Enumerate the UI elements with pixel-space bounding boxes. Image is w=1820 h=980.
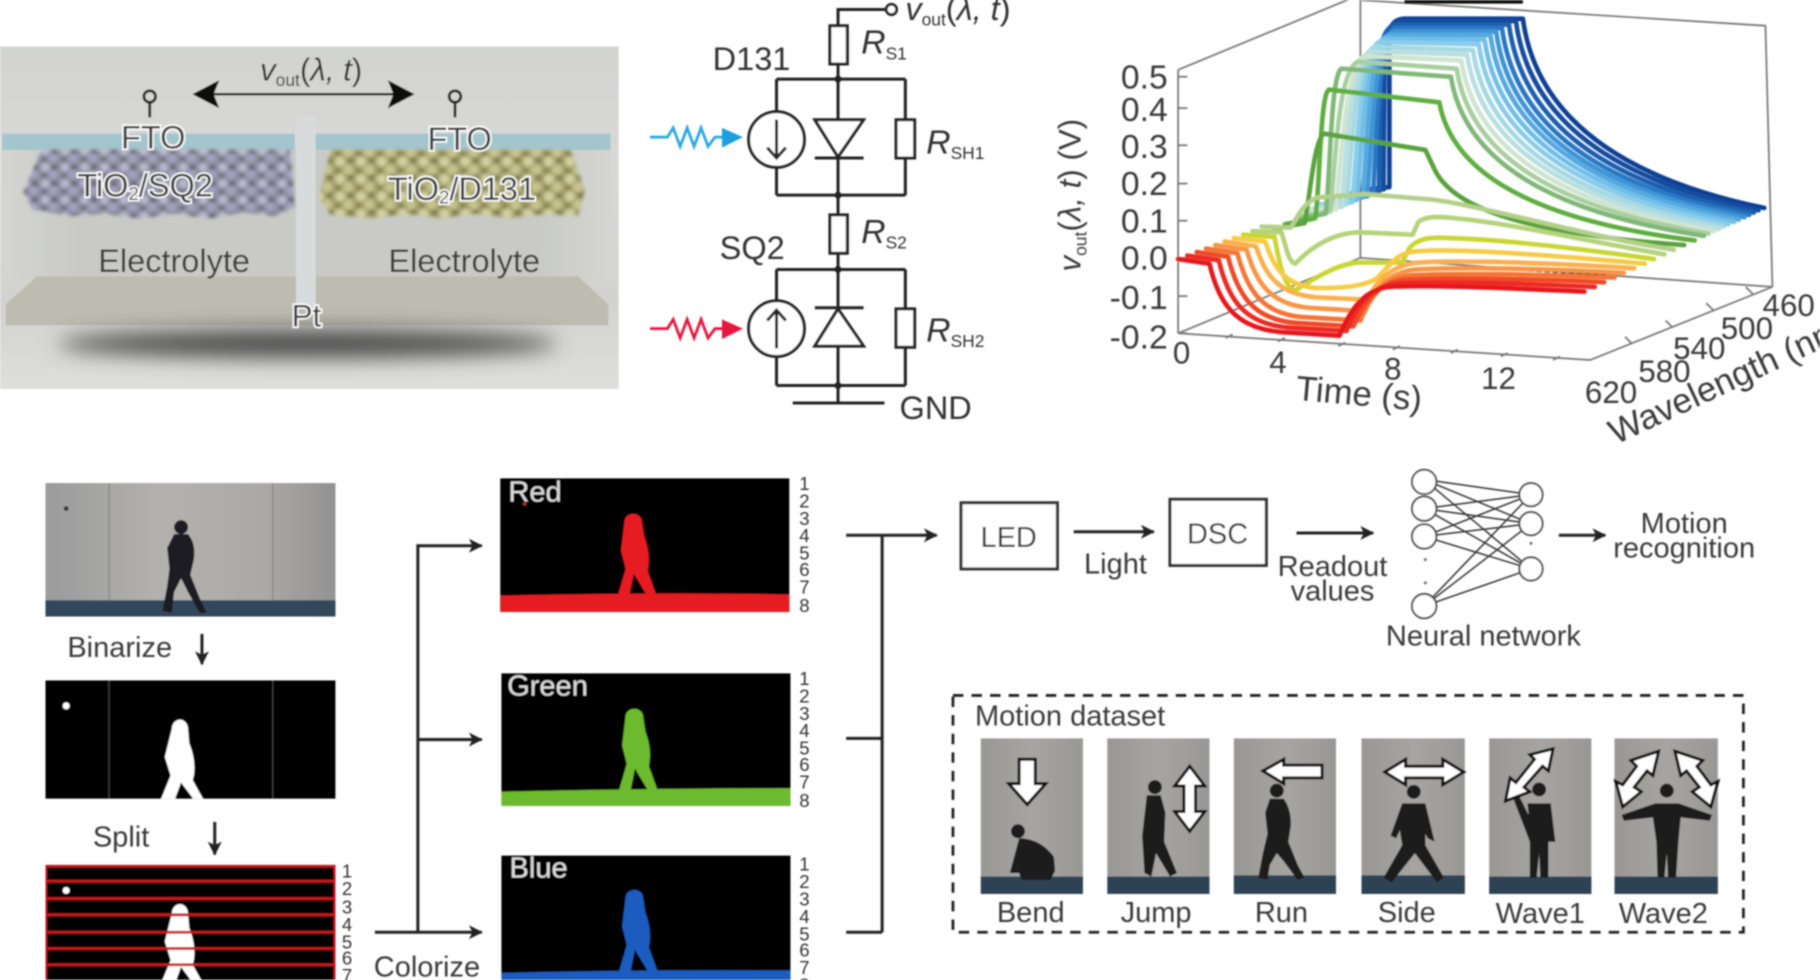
time axis labels: 12 [1481, 361, 1516, 396]
voltage axis labels: 0.3 [1121, 129, 1168, 166]
label RSH1: SH1 [951, 143, 984, 163]
heading motion dataset: Motion dataset [975, 701, 1165, 733]
red numbers: 3 [799, 508, 810, 529]
voltage label: ( [300, 52, 311, 87]
TiO2/SQ2 particles [23, 150, 295, 218]
label Green: Green [507, 670, 588, 702]
voltage axis title: v [1053, 254, 1088, 272]
top edge bar [1404, 0, 1523, 3]
shadow under cell [58, 330, 557, 358]
label Light: Light [1084, 549, 1147, 581]
wavelength axis labels: 580 [1638, 354, 1691, 389]
merge bracket arrow [846, 535, 937, 932]
label Blue: Blue [510, 853, 568, 885]
green numbers: 3 [799, 703, 810, 724]
split label: Split [93, 821, 149, 853]
split frame [45, 865, 335, 980]
label Red: Red [508, 477, 562, 509]
diode SQ2 [815, 308, 864, 346]
photo Run [1234, 738, 1336, 894]
label motion recognition: Motion [1641, 508, 1728, 540]
centre gap [296, 116, 316, 308]
pin left [144, 91, 156, 117]
labels: Wave1 [1496, 898, 1585, 930]
time axis title: Time (s) [1294, 369, 1424, 419]
split numbers: 1 [342, 861, 352, 882]
label readout values: values [1291, 575, 1374, 607]
wavelength axis labels: 620 [1585, 375, 1637, 410]
voltage axis title: λ, t) (V) [1053, 119, 1088, 221]
split numbers: 4 [342, 914, 352, 935]
LED box [961, 503, 1057, 569]
photo Jump [1107, 738, 1209, 894]
wavelength axis labels: 460 [1763, 288, 1815, 323]
Pt electrode plate [6, 276, 608, 325]
blue numbers: 4 [799, 906, 810, 927]
photo Side [1362, 738, 1465, 894]
label RS1: R [861, 25, 886, 62]
red numbers [799, 473, 810, 616]
neural network diagram [1412, 470, 1543, 618]
time axis labels [1173, 340, 1516, 390]
output arrow [1559, 534, 1605, 537]
label RS2: S2 [886, 233, 907, 253]
label neural network: Neural network [1386, 621, 1581, 653]
voltage axis labels: 0.0 [1121, 240, 1168, 277]
green numbers: 2 [799, 685, 810, 706]
equivalent circuit [650, 0, 1011, 426]
circuit label vout: out [922, 10, 946, 30]
labels: Side [1378, 897, 1436, 929]
blue numbers [799, 854, 810, 980]
label RSH1: R [926, 124, 951, 161]
blue numbers: 2 [799, 871, 810, 892]
split numbers: 5 [342, 931, 352, 952]
blue light input [650, 128, 743, 148]
LED box: LED [980, 522, 1037, 554]
green numbers [799, 668, 810, 811]
red numbers: 7 [799, 576, 810, 597]
voltage axis labels: 0.1 [1121, 203, 1168, 240]
red frame [500, 477, 789, 612]
voltage axis labels: 0.5 [1121, 59, 1168, 96]
voltage axis labels: 0.4 [1121, 92, 1168, 129]
green numbers: 4 [799, 720, 810, 741]
blue frame [501, 853, 790, 980]
photo Wave2 [1615, 738, 1718, 894]
back floor dashes [1480, 267, 1605, 275]
blue numbers: 7 [799, 957, 810, 978]
panel: motion dataset [953, 695, 1743, 932]
label SQ2: SQ2 [720, 230, 785, 266]
red numbers: 6 [799, 559, 810, 580]
time axis labels: 0 [1173, 335, 1190, 370]
labels: Bend [997, 897, 1065, 929]
labels: Run [1255, 897, 1308, 929]
label TiO2/D131: 2 [439, 186, 449, 207]
voltage axis labels: -0.2 [1110, 319, 1168, 356]
labels [997, 897, 1708, 930]
label RSH2: SH2 [951, 331, 984, 351]
label TiO2/SQ2: TiO [77, 167, 128, 203]
red light input [650, 319, 743, 339]
diode D131 [815, 120, 864, 158]
readout arrow [1297, 532, 1373, 534]
voltage curves [1178, 19, 1764, 336]
label TiO2/SQ2: /SQ2 [139, 167, 213, 203]
electrolyte volume [2, 149, 611, 279]
split numbers: 2 [342, 878, 352, 899]
split numbers [342, 861, 352, 980]
split numbers: 3 [342, 897, 352, 918]
labels: Jump [1121, 897, 1192, 929]
red numbers: 8 [799, 595, 810, 616]
double arrow [195, 83, 412, 106]
original photo frame [45, 483, 335, 617]
split numbers: 6 [342, 948, 352, 969]
label GND: GND [900, 390, 972, 426]
3D voltage chart [1053, 0, 1820, 452]
chart box axes [1178, 0, 1772, 360]
split arrow [213, 822, 216, 854]
green numbers: 7 [799, 771, 810, 792]
light arrow [1074, 530, 1154, 533]
label D131: D131 [713, 41, 790, 77]
panel: dye-sensitized cell schematic [0, 47, 619, 389]
wires [777, 9, 905, 403]
time axis labels: 4 [1269, 345, 1287, 380]
junction dots [835, 76, 842, 389]
wavelength axis labels: 500 [1721, 311, 1773, 346]
voltage label: λ, t) [310, 52, 362, 87]
DSC box: DSC [1187, 518, 1248, 550]
red numbers: 1 [799, 473, 810, 494]
voltage axis labels: -0.1 [1110, 280, 1168, 317]
binarize label: Binarize [67, 632, 172, 664]
label electrolyte left: Electrolyte [98, 243, 250, 279]
resistors [830, 26, 915, 347]
label Pt: Pt [292, 298, 322, 333]
blue numbers: 3 [799, 889, 810, 910]
voltage axis title: ( [1053, 221, 1088, 232]
labels: Wave2 [1619, 898, 1708, 930]
blue numbers: 5 [799, 923, 810, 944]
voltage axis labels [1110, 59, 1168, 356]
red numbers: 4 [799, 525, 810, 546]
wavelength axis labels: 540 [1673, 331, 1725, 366]
binarized frame [45, 680, 335, 801]
blue numbers: 6 [799, 940, 810, 961]
TiO2/D131 particles [319, 150, 585, 218]
blue numbers: 1 [799, 854, 810, 875]
red numbers: 2 [799, 490, 810, 511]
voltage axis labels: 0.2 [1121, 166, 1168, 203]
photo Wave1 [1489, 738, 1591, 894]
green numbers: 1 [799, 668, 810, 689]
red numbers: 5 [799, 543, 810, 564]
output terminal [886, 4, 897, 15]
label RS1: S1 [886, 43, 907, 63]
label readout values: Readout [1278, 551, 1387, 583]
FTO layers [2, 134, 611, 150]
voltage label: v [260, 52, 278, 87]
current source D131 [749, 112, 804, 167]
binarize arrow [201, 634, 203, 664]
label TiO2/SQ2: 2 [128, 183, 139, 204]
label RS2: R [861, 214, 886, 251]
label FTO right: FTO [427, 121, 492, 157]
label motion recognition: recognition [1613, 532, 1755, 564]
colorize flow arrows [375, 546, 482, 932]
label FTO left: FTO [121, 120, 185, 156]
green frame [501, 670, 790, 806]
voltage label: out [276, 70, 300, 90]
label TiO2/D131: /D131 [449, 171, 536, 207]
label RSH2: R [926, 312, 951, 349]
wavelength axis labels [1585, 288, 1815, 410]
green numbers: 5 [799, 738, 810, 759]
DSC box [1170, 499, 1266, 565]
photo Bend [981, 738, 1083, 894]
current source SQ2 [749, 301, 804, 357]
green numbers: 6 [799, 754, 810, 775]
axis ticks [1178, 77, 1753, 360]
voltage axis title: out [1070, 232, 1090, 256]
green numbers: 8 [799, 790, 810, 811]
time axis labels: 8 [1384, 352, 1402, 387]
label electrolyte right: Electrolyte [388, 243, 540, 279]
pin right [449, 91, 461, 117]
label TiO2/D131: TiO [388, 171, 439, 207]
